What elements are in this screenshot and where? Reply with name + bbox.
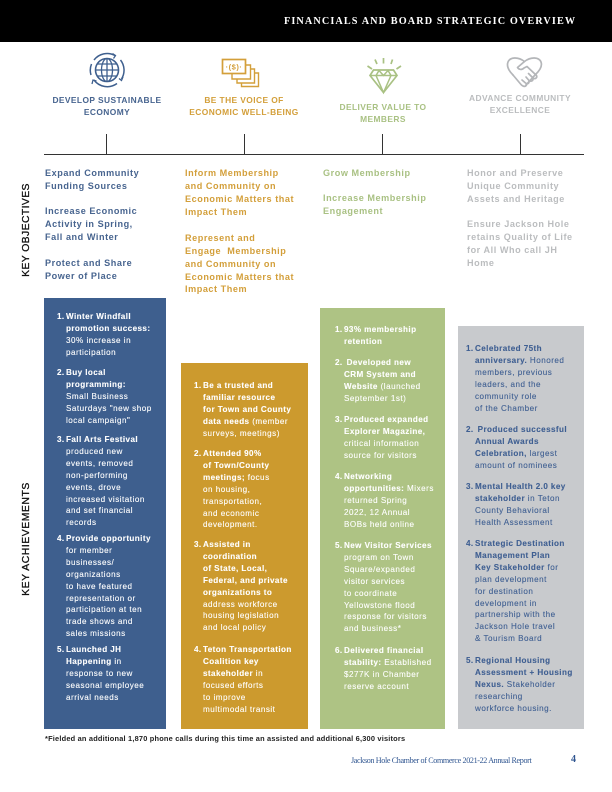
objectives: deliver value to members: Engagement: [323, 206, 383, 216]
panel: economic well-being achievements: 1.: [194, 381, 202, 390]
item 3: of State, Local,: [203, 564, 267, 573]
item 4: Coalition key: [203, 657, 259, 666]
panel: deliver value achievements: 4.: [335, 472, 343, 481]
item 5: researching: [475, 692, 523, 701]
item 6: [335, 646, 432, 691]
item 4: participation at ten: [66, 605, 142, 614]
item 5: response to new: [66, 669, 133, 678]
objectives: voice of economic well-being: Economic Matters that: [185, 194, 294, 204]
item 4: focused efforts: [203, 681, 263, 690]
item 1: Celebrated 75th: [475, 344, 542, 353]
item 2: Annual Awards: [475, 437, 539, 446]
objectives: voice of economic well-being: [185, 168, 294, 294]
item 5: Happening in: [66, 657, 122, 666]
item 4: sales missions: [66, 629, 126, 638]
panel: deliver value achievements: 6.: [335, 646, 343, 655]
item 4: plan development: [475, 575, 547, 584]
timeline: [44, 134, 584, 155]
item 1: participation: [66, 348, 116, 357]
heading: be the voice of economic well-being: ECONOMIC WELL-BEING: [189, 106, 299, 116]
item 3: Explorer Magazine,: [344, 427, 425, 436]
item 2: Buy local: [66, 368, 106, 377]
panel: economic well-being achievements: 2.: [194, 449, 202, 458]
item 2: transportation,: [203, 497, 262, 506]
item 5: and business*: [344, 624, 401, 633]
item 1: familiar resource: [203, 393, 275, 402]
item 2: Celebration, largest: [475, 449, 557, 458]
panel: advance community achievements: 5.: [466, 656, 474, 665]
item 2: development.: [203, 520, 258, 529]
item 3: Federal, and private: [203, 576, 288, 585]
objectives: voice of economic well-being: Represent and: [185, 233, 255, 243]
heading: be the voice of economic well-being: BE THE VOICE OF: [204, 95, 284, 105]
item 5: to coordinate: [344, 589, 397, 598]
item 3: Fall Arts Festival: [66, 435, 138, 444]
item 1: Be a trusted and: [203, 381, 273, 390]
heading: develop sustainable economy: ECONOMY: [84, 106, 130, 116]
item 3: address workforce: [203, 600, 278, 609]
item 1: [466, 344, 564, 413]
item 4: to improve: [203, 693, 246, 702]
footnote: *Fielded an additional 1,870 phone calls during this time an assisted and additional 6,300 visitors: [45, 734, 405, 743]
panel: deliver value achievements: 3.: [335, 415, 343, 424]
item 4: multimodal transit: [203, 705, 275, 714]
objectives: advance community excellence: Honor and Preserve: [467, 168, 563, 178]
item 5: Yellowstone flood: [344, 601, 415, 610]
item 1: surveys, meetings): [203, 429, 280, 438]
heading: advance community excellence: ADVANCE COMMUNITY: [469, 93, 571, 103]
objectives: voice of economic well-being: Impact Them: [185, 207, 247, 217]
item 6: reserve account: [344, 682, 409, 691]
objectives: advance community excellence: [467, 168, 573, 268]
title: FINANCIALS AND BOARD STRATEGIC OVERVIEW: [284, 16, 576, 27]
panel: deliver value achievements: 5.: [335, 541, 343, 550]
side label: key achievements: KEY ACHIEVEMENTS: [21, 482, 32, 596]
item 4: to have featured: [66, 582, 132, 591]
item 4: & Tourism Board: [475, 634, 542, 643]
footer: report name and page number: 4: [571, 754, 576, 765]
item 1: of the Chamber: [475, 404, 538, 413]
objectives: voice of economic well-being: Inform Membership: [185, 168, 279, 178]
item 3: source for visitors: [344, 451, 417, 460]
item 4: BOBs held online: [344, 520, 415, 529]
item 1: data needs (member: [203, 417, 288, 426]
side label: key objectives: KEY OBJECTIVES: [21, 183, 32, 277]
item 2: Produced successful: [478, 425, 567, 434]
item 2: local campaign": [66, 416, 130, 425]
item 3: records: [66, 518, 96, 527]
heading: develop sustainable economy: [52, 95, 162, 116]
item 3: Mental Health 2.0 key: [475, 482, 566, 491]
panel: deliver value achievements: 1.: [335, 325, 343, 334]
item 5: Launched JH: [66, 645, 121, 654]
icon: stack of dollar bills: [222, 58, 260, 88]
item 3: housing legislation: [203, 611, 279, 620]
item 3: Produced expanded: [344, 415, 428, 424]
item 2: [335, 358, 421, 403]
panel: economic well-being achievements: 3.: [194, 540, 202, 549]
item 2: [57, 368, 152, 425]
item 5: [57, 645, 144, 702]
item 3: and set financial: [66, 506, 133, 515]
item 2: Saturdays "new shop: [66, 404, 152, 413]
panel: advance community achievements: 4.: [466, 539, 474, 548]
item 4: Teton Transportation: [203, 645, 292, 654]
item 4: for destination: [475, 587, 533, 596]
panel: develop sustainable economy achievements: 1.: [57, 312, 65, 321]
header bar: [0, 0, 612, 42]
item 4: Provide opportunity: [66, 534, 151, 543]
dollar glyph: ·($)·: [226, 62, 242, 72]
item 4: [335, 472, 434, 529]
item 6: stability: Established: [344, 658, 432, 667]
item 4: [466, 539, 565, 643]
item 2: Small Business: [66, 392, 128, 401]
item 2: amount of nominees: [475, 461, 557, 470]
item 4: Networking: [344, 472, 392, 481]
item 6: Delivered financial: [344, 646, 424, 655]
item 3: County Behavioral: [475, 506, 550, 515]
icon: globe with circular arrows: [90, 52, 125, 88]
item 3: [57, 435, 145, 527]
item 3: produced new: [66, 447, 123, 456]
item 4: businesses/: [66, 558, 114, 567]
item 3: stakeholder in Teton: [475, 494, 560, 503]
heading: advance community excellence: EXCELLENCE: [490, 104, 550, 114]
panel: develop sustainable economy achievements: 2.: [57, 368, 65, 377]
item 3: increased visitation: [66, 495, 145, 504]
item 1: Winter Windfall: [66, 312, 131, 321]
heading: develop sustainable economy: DEVELOP SUSTAINABLE: [52, 95, 162, 105]
item 3: and local policy: [203, 623, 266, 632]
objectives: voice of economic well-being: Impact Them: [185, 284, 247, 294]
item 5: visitor services: [344, 577, 405, 586]
item 1: retention: [344, 337, 382, 346]
panel: advance community achievements: 1.: [466, 344, 474, 353]
item 3: [194, 540, 288, 632]
item 4: 2022, 12 Annual: [344, 508, 410, 517]
item 4: [194, 645, 292, 714]
objectives: develop sustainable economy: Activity in Spring,: [45, 219, 133, 229]
objectives: advance community excellence: Unique Community: [467, 181, 559, 191]
item 3: Health Assessment: [475, 518, 553, 527]
item 5: New Visitor Services: [344, 541, 432, 550]
item 4: stakeholder in: [203, 669, 263, 678]
objectives: voice of economic well-being: Engage Membership: [185, 246, 286, 256]
objectives: advance community excellence: Home: [467, 258, 494, 268]
item 3: coordination: [203, 552, 257, 561]
objectives: develop sustainable economy: Expand Community: [45, 168, 139, 178]
item 4: for member: [66, 546, 112, 555]
item 4: Key Stakeholder for: [475, 563, 558, 572]
item 4: representation or: [66, 594, 136, 603]
panel: economic well-being achievements: 4.: [194, 645, 202, 654]
panel: advance community achievements: [458, 326, 584, 729]
item 2: CRM System and: [344, 370, 416, 379]
item 2: on housing,: [203, 485, 250, 494]
item 1: community role: [475, 392, 537, 401]
item 3: Assisted in: [203, 540, 251, 549]
item 5: workforce housing.: [475, 704, 552, 713]
item 5: program on Town: [344, 553, 414, 562]
heading: deliver value to members: DELIVER VALUE TO: [340, 102, 426, 112]
objectives: voice of economic well-being: and Community on: [185, 181, 276, 191]
item 2: Website (launched: [344, 382, 421, 391]
item 3: events, drove: [66, 483, 121, 492]
panel: develop sustainable economy achievements: 4.: [57, 534, 65, 543]
item 5: [335, 541, 432, 633]
item 2: September 1st): [344, 394, 406, 403]
panel: economic well-being achievements: [181, 363, 308, 729]
panel: advance community achievements: 3.: [466, 482, 474, 491]
item 3: non-performing: [66, 471, 128, 480]
item 4: Strategic Destination: [475, 539, 565, 548]
item 4: development in: [475, 599, 537, 608]
objectives: deliver value to members: [323, 168, 426, 216]
item 3: events, removed: [66, 459, 133, 468]
icon: heart handshake: [506, 57, 542, 88]
item 4: opportunities: Mixers: [344, 484, 434, 493]
item 4: partnership with the: [475, 610, 556, 619]
item 2: meetings; focus: [203, 473, 270, 482]
item 2: and economic: [203, 509, 259, 518]
item 3: critical information: [344, 439, 419, 448]
item 2: Developed new: [347, 358, 411, 367]
item 1: [57, 312, 150, 357]
item 1: 93% membership: [344, 325, 416, 334]
item 1: 30% increase in: [66, 336, 131, 345]
item 3: [335, 415, 428, 460]
objectives: advance community excellence: retains Quality of Life: [467, 232, 573, 242]
heading: advance community excellence: [469, 93, 571, 114]
objectives: voice of economic well-being: and Community on: [185, 259, 276, 269]
item 2: Attended 90%: [203, 449, 262, 458]
item 2: [466, 425, 567, 470]
icon: diamond with rays: [367, 58, 402, 94]
item 5: Square/expanded: [344, 565, 415, 574]
item 6: $277K in Chamber: [344, 670, 420, 679]
item 4: Management Plan: [475, 551, 550, 560]
item 5: Nexus. Stakeholder: [475, 680, 556, 689]
panel: develop sustainable economy achievements: 5.: [57, 645, 65, 654]
item 5: [466, 656, 573, 713]
panel: develop sustainable economy achievements: 3.: [57, 435, 65, 444]
objectives: advance community excellence: for All Who call JH: [467, 245, 557, 255]
item 1: for Town and County: [203, 405, 291, 414]
item 3: [466, 482, 566, 527]
panel: advance community achievements: 2.: [466, 425, 474, 434]
item 2: of Town/County: [203, 461, 269, 470]
item 1: anniversary. Honored: [475, 356, 564, 365]
item 5: Assessment + Housing: [475, 668, 573, 677]
objectives: develop sustainable economy: Increase Economic: [45, 206, 137, 216]
item 2: programming:: [66, 380, 126, 389]
objectives: develop sustainable economy: Funding Sources: [45, 181, 128, 191]
item 4: trade shows and: [66, 617, 133, 626]
heading: deliver value to members: MEMBERS: [360, 114, 406, 124]
item 4: [57, 534, 151, 638]
item 1: leaders, and the: [475, 380, 541, 389]
panel: deliver value achievements: 2.: [335, 358, 343, 367]
item 1: [194, 381, 291, 438]
item 5: arrival needs: [66, 693, 119, 702]
objectives: develop sustainable economy: [45, 168, 139, 281]
item 1: [335, 325, 416, 346]
footer: report name and page number: [351, 754, 576, 765]
panel: deliver value achievements: [320, 308, 445, 729]
objectives: advance community excellence: Assets and Heritage: [467, 194, 565, 204]
item 1: promotion success:: [66, 324, 150, 333]
objectives: develop sustainable economy: Protect and Share: [45, 258, 132, 268]
heading: be the voice of economic well-being: [189, 95, 299, 116]
objectives: deliver value to members: Increase Membership: [323, 193, 426, 203]
item 4: Jackson Hole travel: [475, 622, 555, 631]
item 5: response for visitors: [344, 612, 427, 621]
footer: report name and page number: Jackson Hole Chamber of Commerce 2021-22 Annual Report: [351, 756, 531, 765]
item 5: seasonal employee: [66, 681, 144, 690]
objectives: deliver value to members: Grow Membership: [323, 168, 411, 178]
heading: deliver value to members: [340, 102, 426, 124]
item 4: returned Spring: [344, 496, 407, 505]
panel: develop sustainable economy achievements: [44, 298, 166, 729]
item 1: members, previous: [475, 368, 552, 377]
objectives: develop sustainable economy: Power of Place: [45, 271, 117, 281]
objectives: voice of economic well-being: Economic Matters that: [185, 272, 294, 282]
item 5: Regional Housing: [475, 656, 551, 665]
item 2: [194, 449, 270, 529]
item 3: organizations to: [203, 588, 272, 597]
objectives: develop sustainable economy: Fall and Winter: [45, 232, 118, 242]
item 4: organizations: [66, 570, 121, 579]
objectives: advance community excellence: Ensure Jackson Hole: [467, 219, 569, 229]
